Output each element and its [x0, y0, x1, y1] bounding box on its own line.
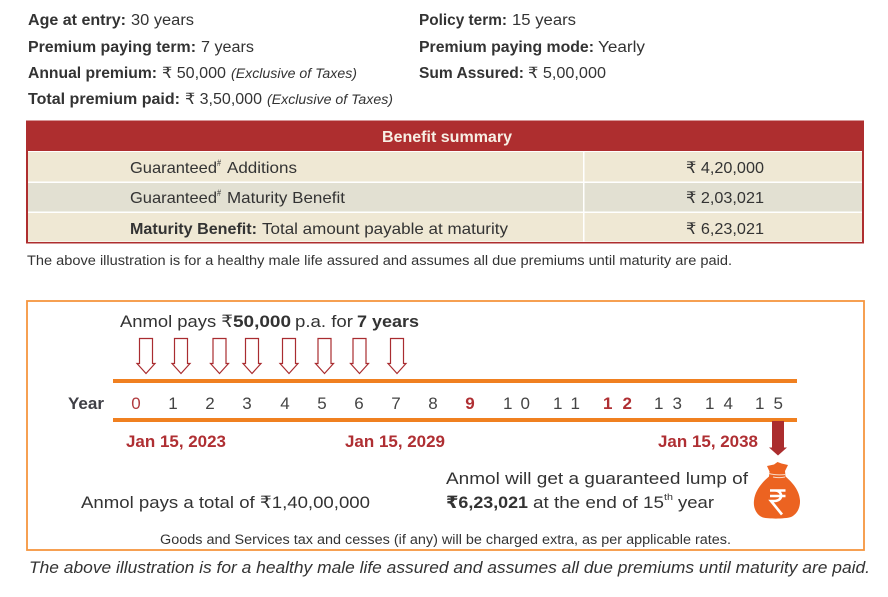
row: guaranteed maturity benefit: ₹ 2,03,021 [686, 190, 764, 207]
year axis labels: Year [68, 395, 105, 413]
icons: premium payment arrows [137, 338, 406, 374]
year axis labels: 4 [280, 394, 290, 413]
timeline heading: 50,000 [233, 312, 291, 331]
row: maturity benefit total: ₹ 6,23,021 [686, 221, 764, 238]
year axis labels: 1 2 [603, 394, 632, 413]
policy details: left column: 7 years [201, 39, 254, 56]
timeline dates: Jan 15, 2029 [345, 433, 445, 451]
policy details: right column [419, 12, 645, 82]
timeline heading: p.a. for [295, 312, 353, 331]
policy details: left column: Age at entry: [28, 12, 126, 29]
timeline heading [120, 312, 419, 331]
year axis labels: 3 [242, 394, 252, 413]
callout: guaranteed lump sum: ₹6,23,021 [446, 493, 528, 512]
timeline heading: Anmol pays ₹ [120, 312, 233, 331]
year axis labels: 7 [391, 394, 401, 413]
bottom illustration note: The above illustration is for a healthy male life assured and assumes all due premiums until maturity are paid. [29, 558, 870, 577]
policy details: left column: (Exclusive of Taxes) [231, 66, 357, 81]
row: guaranteed maturity benefit: # [217, 188, 221, 198]
policy details: left column: ₹ 3,50,000 [185, 91, 262, 108]
year axis labels: 1 4 [705, 394, 733, 413]
row: guaranteed additions: # [217, 158, 221, 168]
callout: guaranteed lump sum: th [664, 492, 673, 503]
row: guaranteed maturity benefit: Maturity Benefit [227, 190, 346, 207]
policy details: left column: ₹ 50,000 [162, 65, 226, 82]
year axis labels: 9 [465, 394, 475, 413]
row: maturity benefit total: Total amount payable at maturity [262, 221, 508, 238]
year axis labels: 6 [354, 394, 364, 413]
row: guaranteed maturity benefit: Guaranteed [130, 190, 217, 207]
policy details: left column: Premium paying term: [28, 39, 196, 56]
row: maturity benefit total: Maturity Benefit: [130, 221, 257, 238]
year axis labels: 8 [428, 394, 438, 413]
callout: guaranteed lump sum: year [678, 493, 714, 512]
policy details: left column: (Exclusive of Taxes) [267, 92, 393, 107]
policy details: left column: Total premium paid: [28, 91, 180, 108]
year axis labels: 0 [131, 394, 141, 413]
total paid text: Anmol pays a total of ₹1,40,00,000 [81, 493, 370, 512]
year axis labels [68, 394, 783, 413]
table: benefit summary [26, 120, 864, 244]
table footnote: The above illustration is for a healthy male life assured and assumes all due premiums until maturity are paid. [27, 253, 732, 268]
year axis labels: 1 [168, 394, 178, 413]
policy details: left column [28, 12, 393, 108]
policy details: right column: Yearly [598, 39, 645, 56]
year axis labels: 1 3 [654, 394, 682, 413]
callout: guaranteed lump sum: Anmol will get a guaranteed lump of [446, 469, 748, 488]
timeline dates [126, 433, 758, 451]
callout: guaranteed lump sum [446, 469, 748, 512]
year axis labels: 5 [317, 394, 327, 413]
row: maturity benefit total [28, 213, 862, 242]
policy details: right column: Policy term: [419, 12, 507, 29]
year axis labels: 2 [205, 394, 215, 413]
year axis labels: 1 1 [553, 394, 580, 413]
icon: rupee money bag [754, 462, 800, 519]
year axis labels: 1 5 [755, 394, 783, 413]
policy details: right column: Premium paying mode: [419, 39, 594, 56]
policy details: left column: Annual premium: [28, 65, 157, 82]
row: guaranteed additions: Additions [227, 160, 297, 177]
callout: guaranteed lump sum: at the end of 15 [533, 493, 664, 512]
row: guaranteed maturity benefit [28, 183, 862, 212]
row: guaranteed additions: Guaranteed [130, 160, 217, 177]
policy details: left column: 30 years [131, 12, 194, 29]
panel: payment timeline [27, 301, 864, 550]
timeline heading: 7 years [357, 312, 419, 331]
arrow: maturity payout [769, 421, 787, 456]
row: guaranteed additions: ₹ 4,20,000 [686, 160, 764, 177]
policy details: right column: ₹ 5,00,000 [528, 65, 606, 82]
row: guaranteed additions [28, 152, 862, 182]
policy details: right column: Sum Assured: [419, 65, 524, 82]
table heading: Benefit summary [382, 129, 512, 146]
timeline dates: Jan 15, 2038 [658, 433, 758, 451]
tax note: Goods and Services tax and cesses (if any) will be charged extra, as per applicable rates. [160, 532, 731, 547]
timeline dates: Jan 15, 2023 [126, 433, 226, 451]
policy details: right column: 15 years [512, 12, 576, 29]
year axis labels: 1 0 [503, 394, 530, 413]
